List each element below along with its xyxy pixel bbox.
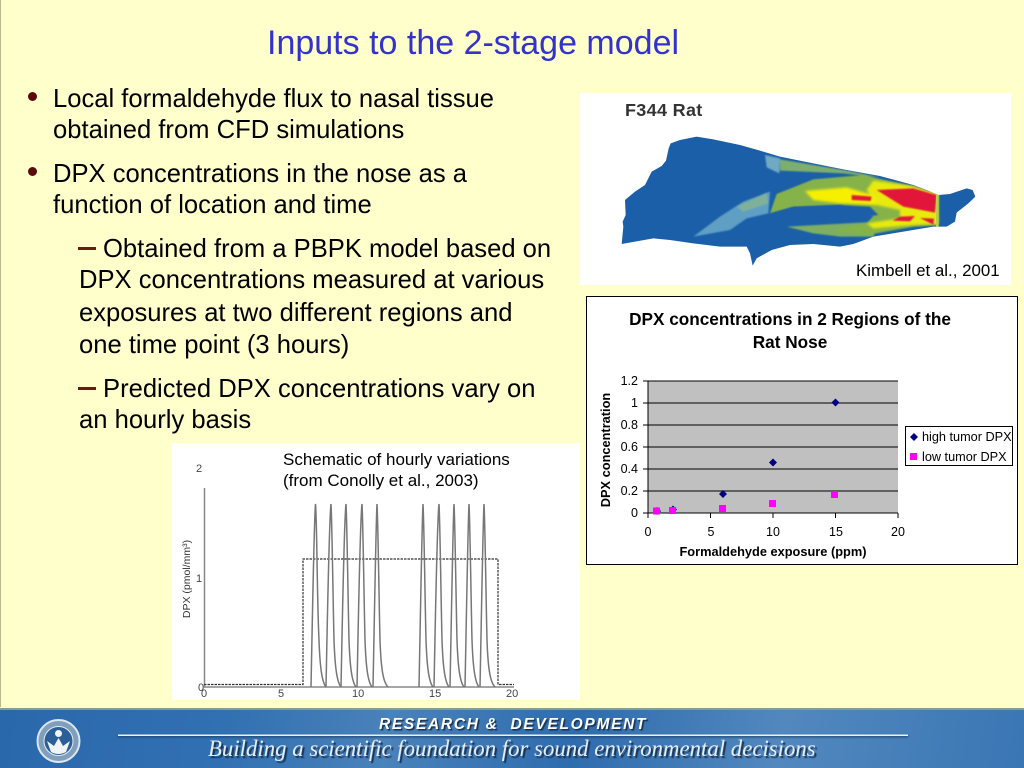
footer tagline: Building a scientific foundation for sound environmental decisions <box>208 736 816 761</box>
x axis labels: 10 <box>766 525 780 539</box>
axis labels: 5 <box>278 688 284 700</box>
axis labels <box>196 463 518 700</box>
rat heading: F344 Rat <box>625 100 703 120</box>
legend: high tumor DPX <box>922 430 1012 444</box>
chart title <box>629 309 951 352</box>
constant exposure dashed curve <box>204 559 514 684</box>
sub-bullet: predicted variation <box>78 375 535 434</box>
footer heading: RESEARCH & DEVELOPMENT <box>379 716 647 733</box>
axis labels: 20 <box>506 688 518 700</box>
chart title: Rat Nose <box>753 332 827 352</box>
chart title: DPX concentrations in 2 Regions of the <box>629 309 951 329</box>
low tumor series <box>653 491 838 514</box>
axis labels: 10 <box>352 688 364 700</box>
axis labels: 0 <box>201 688 207 700</box>
chart: schematic of hourly variations <box>172 443 580 700</box>
sub-bullet: PBPK model <box>78 235 551 359</box>
x axis labels: 0 <box>645 525 652 539</box>
legend <box>906 426 1012 466</box>
x axis labels <box>645 525 905 539</box>
axis labels: 15 <box>429 688 441 700</box>
plot area <box>643 381 898 518</box>
citation: Kimbell et al., 2001 <box>856 261 1000 280</box>
footer banner <box>0 708 1024 768</box>
y axis title: DPX (pmol/mm³) <box>181 540 193 618</box>
bullet: DPX concentrations: function of location and time <box>53 191 372 219</box>
sub-bullet: PBPK model: one time point (3 hours) <box>79 331 349 359</box>
bullet: formaldehyde flux: Local formaldehyde flux to nasal tissue <box>53 85 494 113</box>
sub-bullet: PBPK model: DPX concentrations measured at various <box>79 266 544 294</box>
y axis labels <box>621 374 638 520</box>
axis labels: 1 <box>196 573 202 585</box>
image panel: rat nose flux map <box>580 93 1011 285</box>
axis labels: 2 <box>196 463 202 475</box>
y axis labels: 0.6 <box>621 440 638 454</box>
icon: EPA seal <box>38 720 80 762</box>
sub-bullet: PBPK model: Obtained from a PBPK model based on <box>103 235 551 263</box>
flux map <box>622 136 976 266</box>
axes <box>204 488 514 687</box>
title: Inputs to the 2-stage model <box>267 24 679 62</box>
bullet: formaldehyde flux <box>28 85 494 144</box>
bullet: DPX concentrations <box>28 160 467 219</box>
bullet: formaldehyde flux: obtained from CFD simulations <box>53 116 404 144</box>
caption <box>283 450 510 490</box>
y axis labels: 1.2 <box>621 374 638 388</box>
x axis labels: 15 <box>829 525 843 539</box>
caption: Schematic of hourly variations <box>283 450 510 469</box>
y axis title: DPX concentration <box>598 393 613 507</box>
y axis labels: 0 <box>631 506 638 520</box>
bullet: DPX concentrations: DPX concentrations in the nose as a <box>53 160 467 188</box>
y axis labels: 1 <box>631 396 638 410</box>
y axis labels: 0.8 <box>621 418 638 432</box>
caption: (from Conolly et al., 2003) <box>283 471 479 490</box>
hourly spikes <box>311 504 495 687</box>
high tumor series <box>653 398 840 515</box>
sub-bullet: predicted variation: an hourly basis <box>79 406 251 434</box>
chart: DPX concentrations in 2 regions <box>586 296 1018 565</box>
x axis title: Formaldehyde exposure (ppm) <box>679 544 867 559</box>
legend: low tumor DPX <box>922 450 1007 464</box>
x axis labels: 20 <box>891 525 905 539</box>
sub-bullet: predicted variation: Predicted DPX concentrations vary on <box>103 375 535 403</box>
divider line <box>118 734 908 736</box>
x axis labels: 5 <box>708 525 715 539</box>
y axis labels: 0.2 <box>621 484 638 498</box>
axis labels: 0 <box>198 682 204 694</box>
y axis labels: 0.4 <box>621 462 638 476</box>
sub-bullet: PBPK model: exposures at two different regions and <box>79 299 512 327</box>
